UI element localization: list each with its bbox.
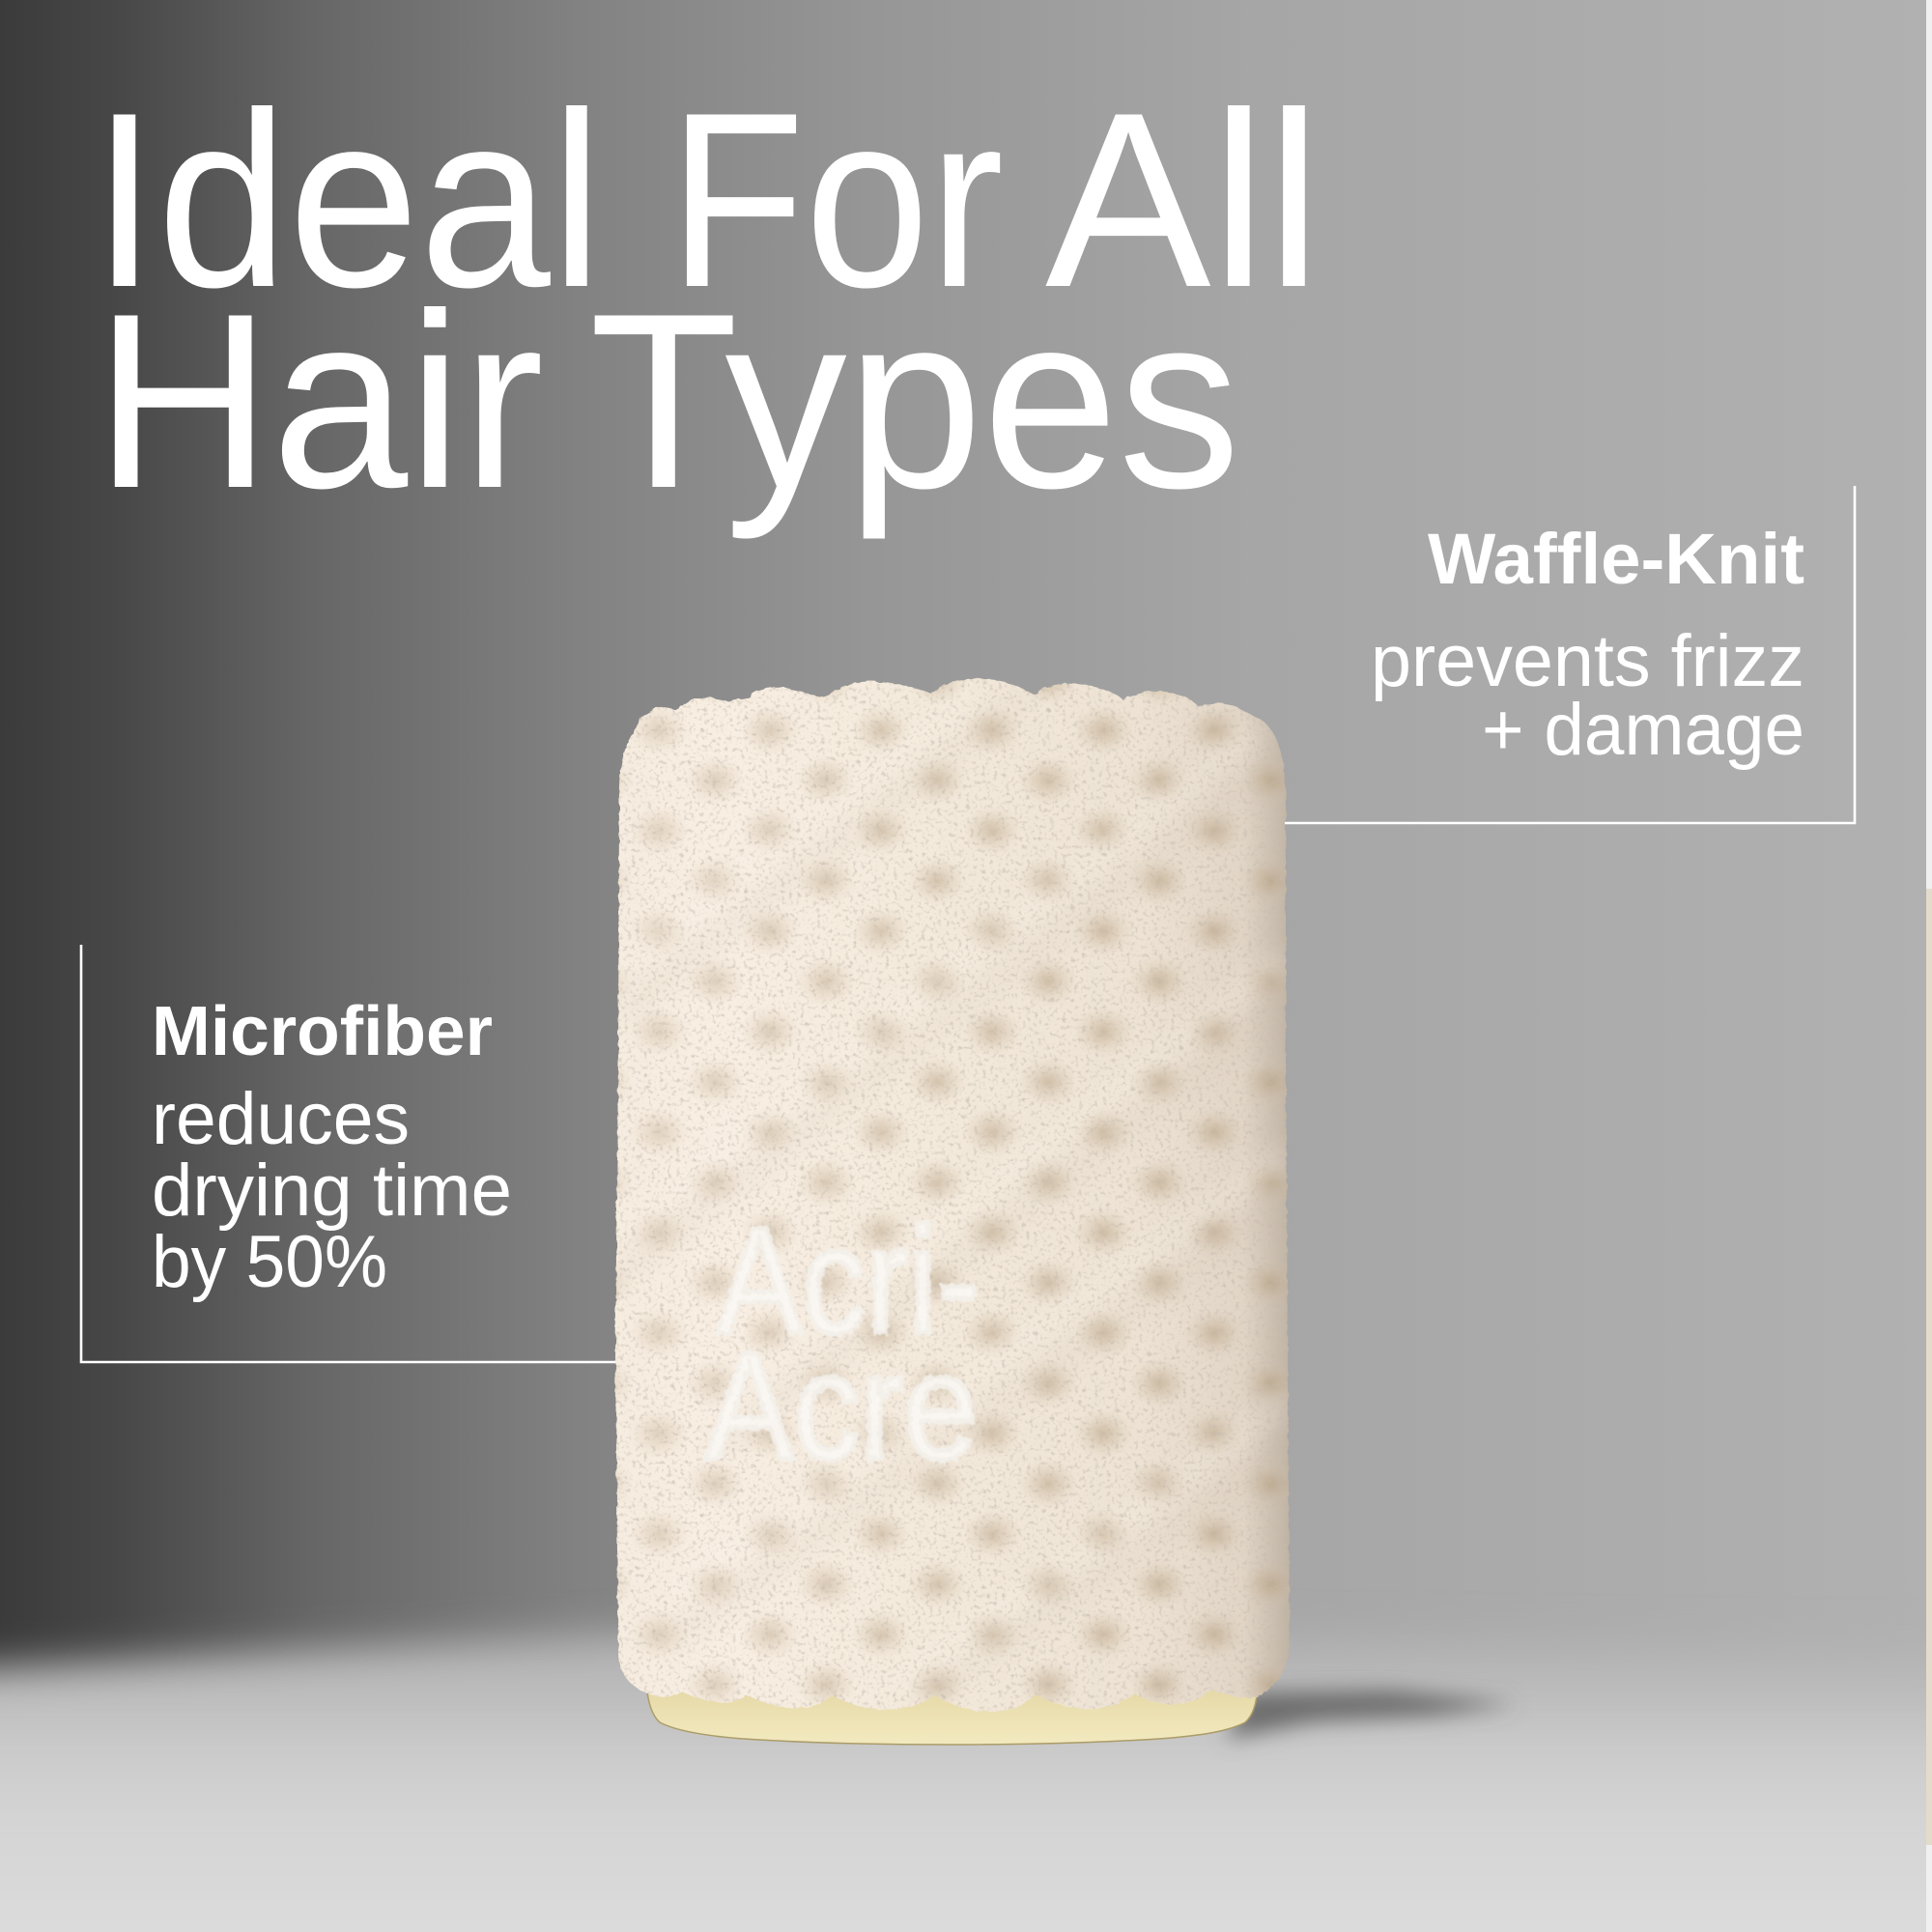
towel base band [646, 1681, 1258, 1745]
towel body with waffle texture [599, 667, 1304, 1724]
callout text: microfiber: Microfiber [152, 993, 493, 1070]
callout text: microfiber: drying time [152, 1150, 512, 1232]
right edge sliver of neighbouring image [1926, 0, 1932, 1932]
callout text: microfiber [152, 993, 512, 1303]
callout text: waffle-knit [1371, 519, 1804, 771]
callout text: waffle-knit: + damage [1482, 689, 1804, 771]
title: Hair [95, 261, 544, 540]
title: For [668, 60, 1004, 339]
embroidered logo [705, 1196, 980, 1492]
callout text: microfiber: reduces [152, 1078, 410, 1160]
callout text: microfiber: by 50% [152, 1221, 387, 1303]
title: Types [589, 261, 1240, 541]
title: Ideal [92, 60, 603, 339]
title: All [1045, 60, 1321, 339]
embroidered logo: Acri- [717, 1196, 980, 1366]
callout text: waffle-knit: Waffle-Knit [1428, 519, 1804, 599]
callout line: waffle-knit [1284, 486, 1855, 823]
callout text: waffle-knit: prevents frizz [1371, 620, 1804, 702]
embroidered logo: Acre [705, 1321, 978, 1492]
product: towel [599, 667, 1304, 1745]
floor shadow of towel [1227, 1690, 1517, 1739]
title [92, 60, 1321, 541]
callout line: microfiber [81, 945, 620, 1362]
